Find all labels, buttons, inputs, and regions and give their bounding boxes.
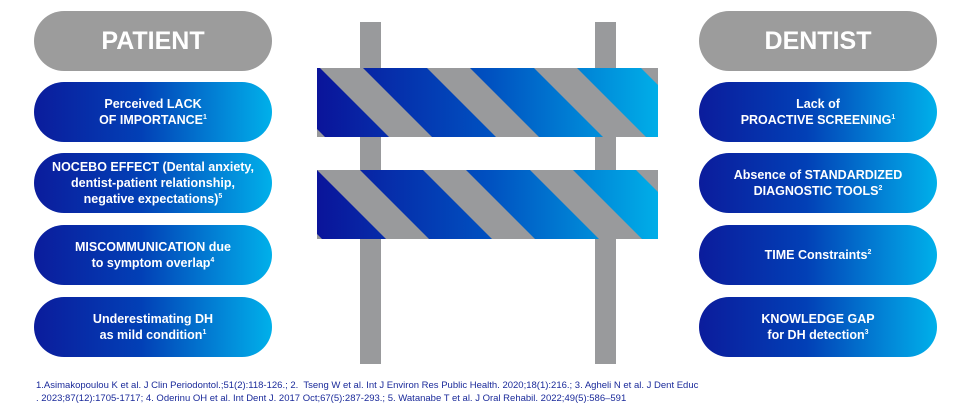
- card: nocebo: [34, 153, 272, 213]
- card: time: TIME Constraints2: [765, 248, 871, 262]
- card: nocebo: negative expectations)5: [84, 192, 222, 206]
- card: underestimating: as mild condition1: [100, 328, 206, 342]
- header: patient: [34, 11, 272, 71]
- card: knowledge gap: [699, 297, 937, 357]
- card: miscommunication: [34, 225, 272, 285]
- card: proactive screening: Lack of: [796, 97, 840, 111]
- card: proactive screening: PROACTIVE SCREENING1: [741, 113, 895, 127]
- card: diagnostic tools: [699, 153, 937, 213]
- card: lack of importance: OF IMPORTANCE1: [99, 113, 207, 127]
- card: diagnostic tools: Absence of STANDARDIZED: [734, 168, 902, 182]
- card: nocebo: NOCEBO EFFECT (Dental anxiety,: [52, 160, 254, 174]
- card: underestimating: [34, 297, 272, 357]
- references: . 2023;87(12):1705-1717; 4. Oderinu OH et al. Int Dent J. 2017 Oct;67(5):287-293.; 5. Watanabe T et al. J Oral Rehabil. 2022;49(5):586–591: [36, 393, 626, 404]
- card: miscommunication: MISCOMMUNICATION due: [75, 240, 231, 254]
- references: [36, 380, 698, 404]
- card: miscommunication: to symptom overlap4: [92, 256, 214, 270]
- card: knowledge gap: KNOWLEDGE GAP: [761, 312, 875, 326]
- card: lack of importance: Perceived LACK: [104, 97, 202, 111]
- card: knowledge gap: for DH detection3: [767, 328, 869, 342]
- posts: [360, 22, 381, 364]
- card: diagnostic tools: DIAGNOSTIC TOOLS2: [754, 184, 882, 198]
- barrier illustration: [317, 22, 658, 364]
- header: dentist: DENTIST: [765, 26, 871, 54]
- barrier bar top: [317, 68, 658, 137]
- card: nocebo: dentist-patient relationship,: [71, 176, 235, 190]
- card: proactive screening: [699, 82, 937, 142]
- card: underestimating: Underestimating DH: [93, 312, 213, 326]
- references: 1.Asimakopoulou K et al. J Clin Periodontol.;51(2):118-126.; 2. Tseng W et al. Int J Environ Res Public Health. 2020;18(1):216.; 3. Agheli N et al. J Dent Educ: [36, 380, 698, 391]
- card: lack of importance: [34, 82, 272, 142]
- card: time: [699, 225, 937, 285]
- header: patient: PATIENT: [101, 26, 205, 54]
- barrier bar bottom: [317, 170, 658, 239]
- header: dentist: [699, 11, 937, 71]
